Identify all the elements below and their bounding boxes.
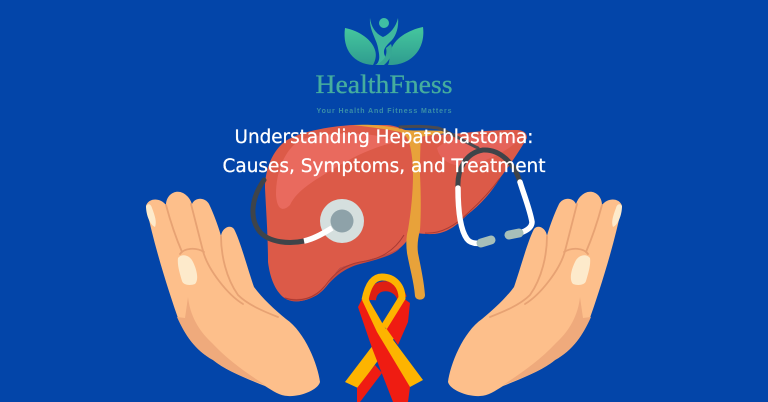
thumb nail	[178, 255, 197, 285]
ribbon right upper	[386, 298, 410, 345]
palm shadow right	[503, 297, 591, 385]
icon: leaves and figure	[345, 18, 423, 65]
illustration: liver	[253, 125, 532, 301]
liver highlight left lobe	[276, 133, 395, 209]
hand silhouette	[146, 192, 320, 396]
left hand	[146, 192, 320, 396]
thumb nail right	[571, 255, 590, 285]
liver lower shadow	[283, 248, 400, 301]
title	[222, 127, 546, 177]
liver highlight right lobe	[437, 136, 520, 166]
bile duct	[353, 125, 447, 300]
awareness ribbon	[345, 277, 423, 402]
title line 2: Causes, Symptoms, and Treatment	[222, 156, 546, 177]
finger creases	[166, 204, 278, 317]
logo wordmark: HealthFness	[316, 70, 452, 99]
title line 1: Understanding Hepatoblastoma:	[234, 127, 534, 148]
logo tagline: Your Health And Fitness Matters	[316, 108, 452, 115]
ribbon tail left	[345, 328, 395, 388]
ribbon main strand	[358, 299, 410, 402]
hand silhouette right	[448, 192, 622, 396]
little finger nail	[146, 204, 156, 227]
liver body	[265, 125, 527, 301]
palm shadow	[177, 297, 265, 385]
logo: HealthFness	[316, 18, 452, 115]
stethoscope	[253, 126, 532, 243]
right hand	[448, 192, 622, 396]
liver crease lines	[285, 235, 404, 300]
ribbon inner loop	[371, 286, 402, 300]
finger creases right	[490, 204, 602, 317]
little finger nail right	[612, 204, 622, 227]
